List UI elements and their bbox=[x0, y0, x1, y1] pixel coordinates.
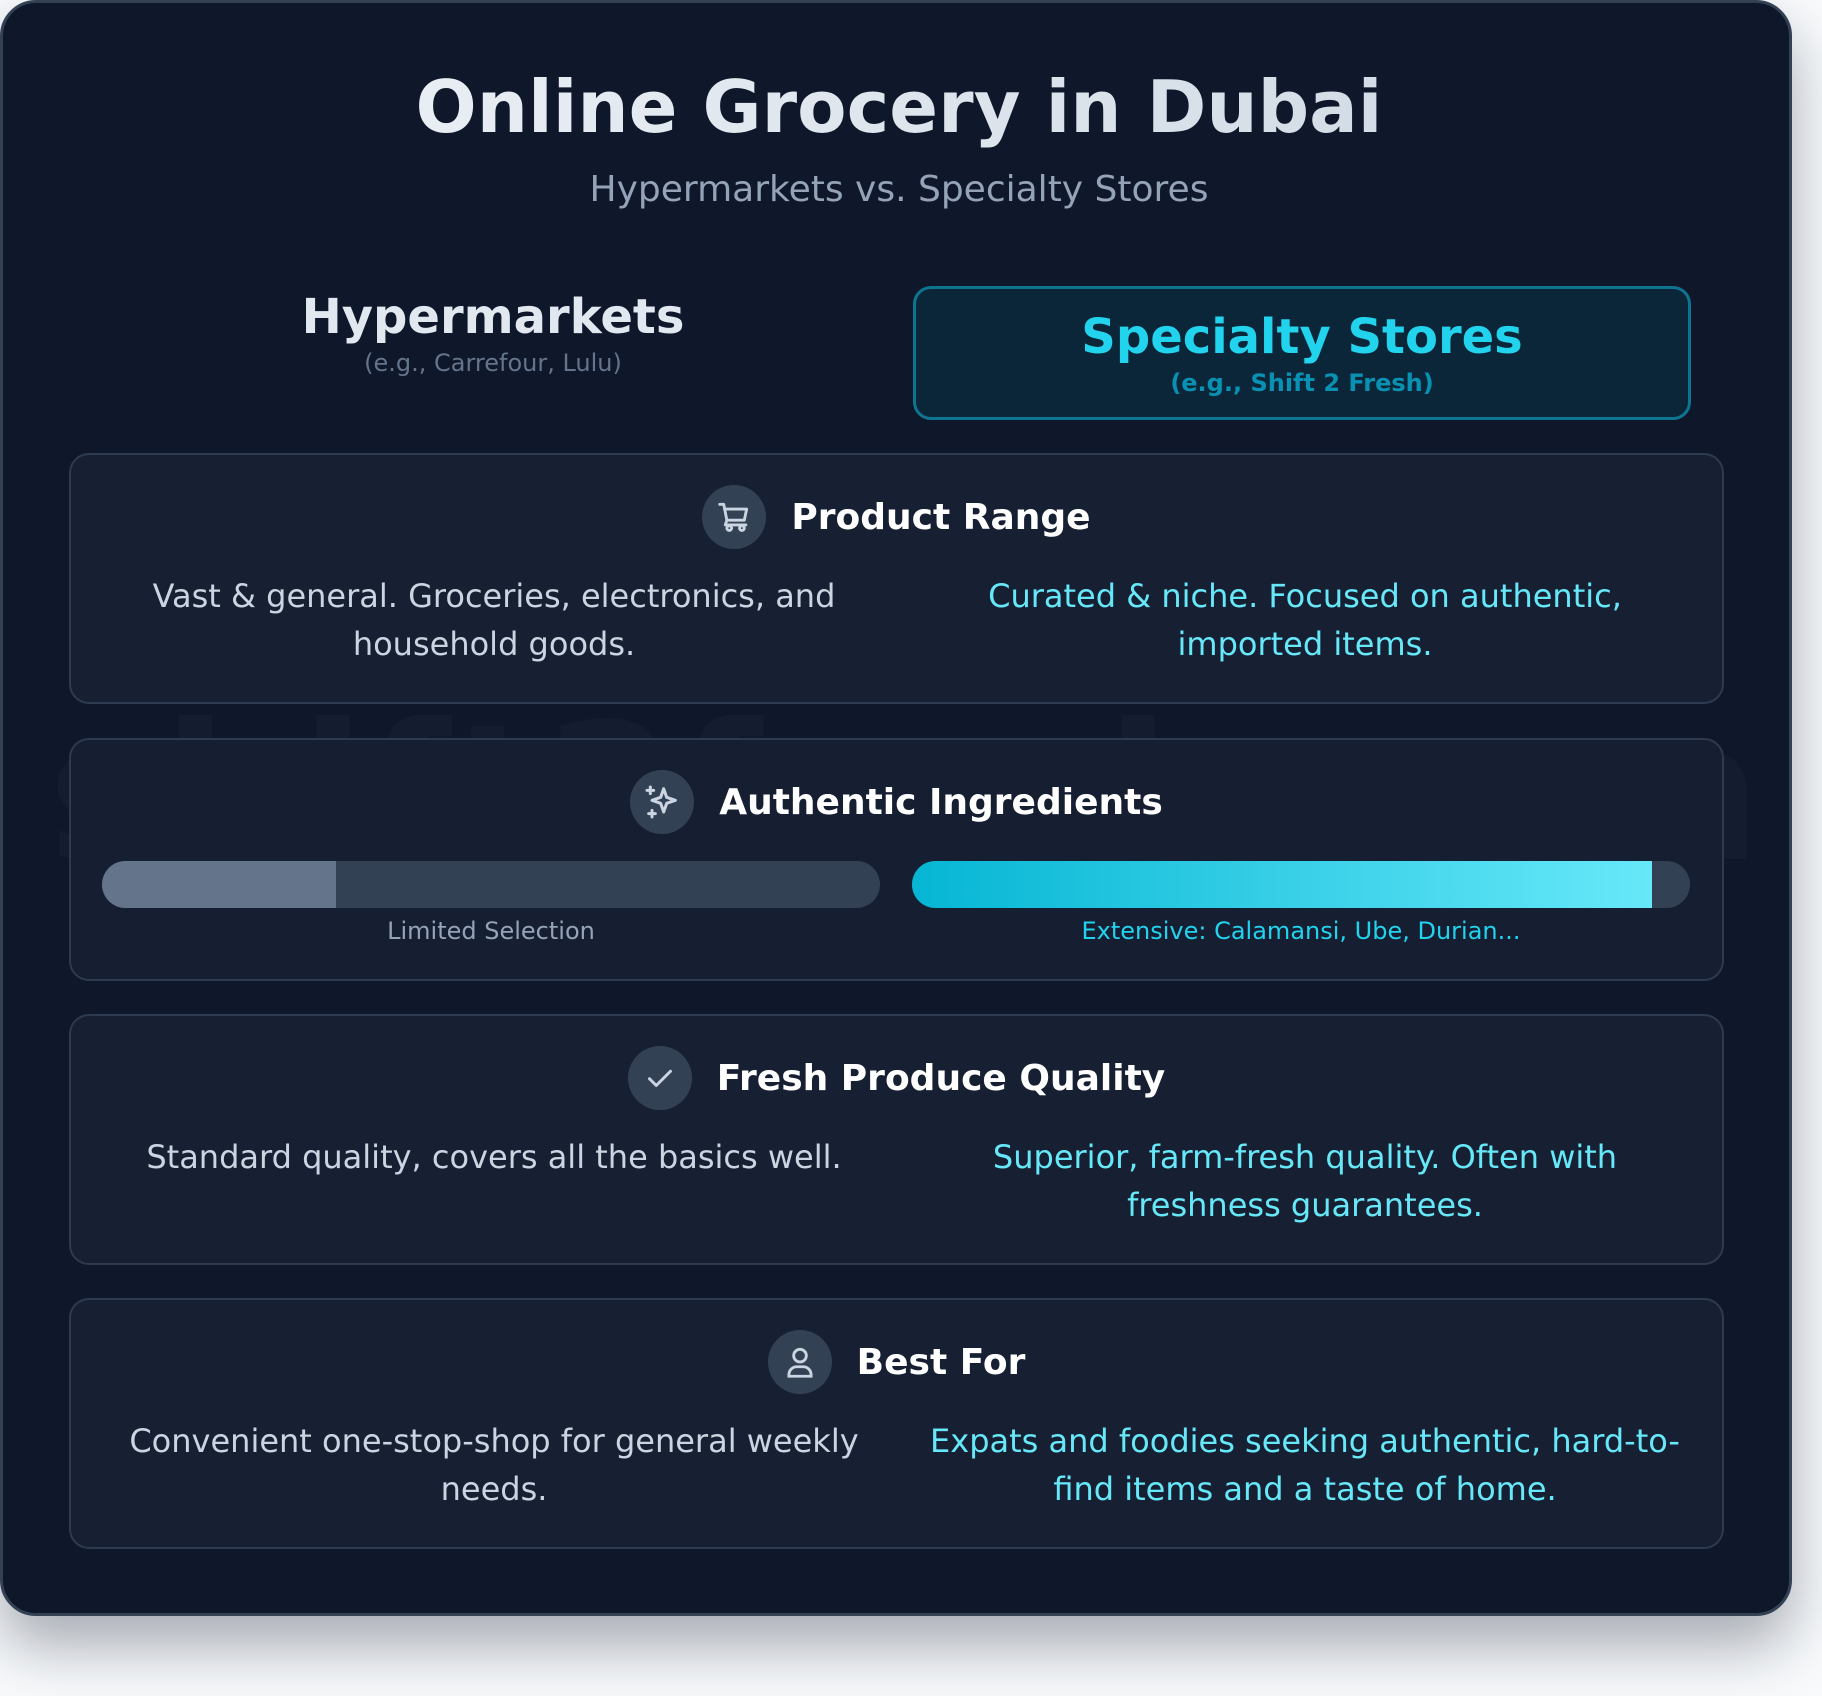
column header: specialty stores: Specialty Stores bbox=[1081, 309, 1523, 365]
heading: authentic ingredients: Authentic Ingredients bbox=[719, 782, 1163, 822]
title bbox=[3, 65, 1795, 149]
column header: hypermarkets bbox=[302, 289, 684, 377]
column header: specialty stores: (e.g., Shift 2 Fresh) bbox=[1170, 369, 1434, 397]
heading: authentic ingredients bbox=[630, 770, 1163, 834]
text: hypermarkets range: Vast & general. Groceries, electronics, and household goods. bbox=[153, 577, 835, 663]
bar: specialty extensive bbox=[912, 861, 1690, 908]
text: hypermarkets quality: Standard quality, covers all the basics well. bbox=[146, 1138, 842, 1176]
heading: product range: Product Range bbox=[791, 496, 1091, 538]
text: hypermarkets best for: Convenient one-stop-shop for general weekly needs. bbox=[129, 1422, 859, 1508]
panel: authentic ingredients bbox=[69, 738, 1724, 981]
bar: hypermarkets limited bbox=[102, 861, 880, 908]
heading: fresh produce bbox=[628, 1046, 1165, 1110]
panel: product range bbox=[69, 453, 1724, 704]
panel: best for bbox=[69, 1298, 1724, 1549]
heading: best for bbox=[768, 1330, 1026, 1394]
column header: specialty stores bbox=[913, 286, 1691, 420]
heading: product range bbox=[702, 485, 1091, 549]
heading: fresh produce: Fresh Produce Quality bbox=[717, 1058, 1165, 1098]
subtitle: Hypermarkets vs. Specialty Stores bbox=[590, 169, 1208, 210]
heading: best for: Best For bbox=[857, 1342, 1025, 1382]
title: Online Grocery in Dubai bbox=[416, 65, 1382, 149]
text: specialty range: Curated & niche. Focused on authentic, imported items. bbox=[988, 577, 1622, 663]
label: extensive: Extensive: Calamansi, Ube, Durian... bbox=[1081, 917, 1521, 945]
column header: hypermarkets: (e.g., Carrefour, Lulu) bbox=[364, 349, 622, 377]
text: specialty best for: Expats and foodies seeking authentic, hard-to-find items and a taste of home. bbox=[930, 1422, 1680, 1508]
text: specialty quality: Superior, farm-fresh quality. Often with freshness guarantees. bbox=[993, 1138, 1617, 1224]
panel: fresh produce quality bbox=[69, 1014, 1724, 1265]
column header: hypermarkets: Hypermarkets bbox=[302, 289, 684, 345]
watermark: shift2fresh.com bbox=[48, 683, 1764, 904]
label: limited selection: Limited Selection bbox=[387, 917, 595, 945]
